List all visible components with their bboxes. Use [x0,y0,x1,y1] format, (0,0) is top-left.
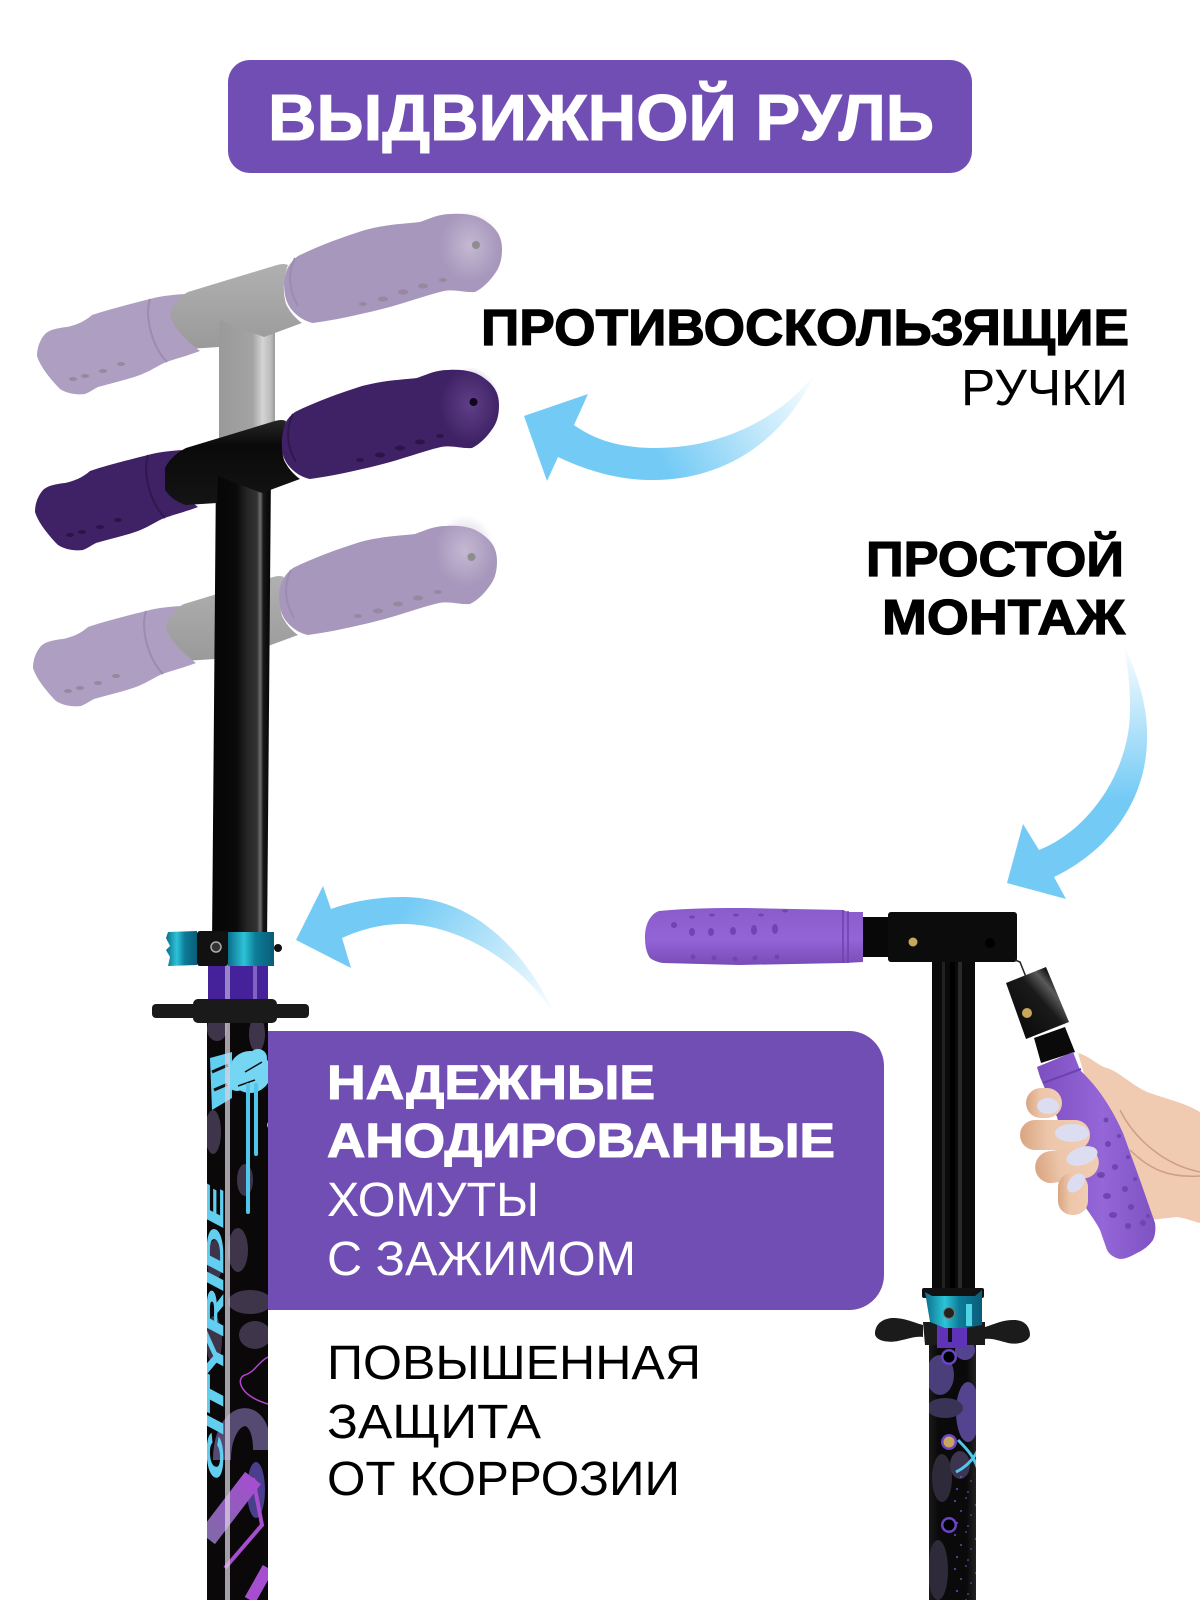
side stem [932,955,975,1300]
text: corrosion protection: ЗАЩИТА [327,1396,541,1449]
wire [1015,960,1026,977]
title banner [228,60,972,173]
text: simple assembly [866,532,1126,645]
side scooter assembly [645,908,1200,1600]
telescopic stem [212,470,271,945]
panel regular text: С ЗАЖИМОМ [327,1233,636,1286]
arrow: to clamp [296,886,556,1017]
logo sticker and paint drips [210,1049,271,1212]
text: corrosion protection: ПОВЫШЕННАЯ [327,1337,701,1390]
teal X marking [956,1440,978,1472]
panel regular text: ХОМУТЫ [327,1174,539,1227]
main scooter column [35,367,500,1600]
panel regular text [327,1174,636,1286]
lower tube with graphics [207,1023,268,1600]
text: anti-slip grips: ПРОТИВОСКОЛЬЗЯЩИЕ [481,299,1129,356]
purple collar [208,962,268,1002]
text: corrosion protection: ОТ КОРРОЗИИ [327,1453,680,1506]
text: corrosion protection [327,1337,701,1506]
anodized clamp [166,931,282,966]
side anodized clamp [922,1288,984,1328]
tube holes [941,1349,957,1533]
arrow: to grips [524,370,817,481]
hand fingers [1020,1088,1101,1215]
hand palm [1078,1053,1200,1223]
panel: clamps callout [268,1031,884,1310]
text: simple assembly: МОНТАЖ [882,591,1126,645]
panel bold heading: НАДЕЖНЫЕ [327,1057,655,1110]
side purple collar [937,1325,967,1348]
arrow: to side handlebar [1007,642,1147,899]
text: anti-slip grips: РУЧКИ [961,359,1128,416]
text: anti-slip grips [481,299,1129,416]
handlebar grips and T-bar [35,367,500,550]
side purple grip held in hand [1037,1052,1155,1259]
panel bold heading: АНОДИРОВАННЫЕ [327,1115,835,1168]
screw on main tube [267,1120,279,1130]
side plastic clip [875,1318,1030,1345]
side lower tube with graphics [929,1345,976,1600]
ghost handlebar: upper position [37,210,502,445]
side T connector [863,912,1017,962]
heart line art [240,1357,268,1404]
panel bold heading [327,1057,835,1168]
side handle left grip [645,908,863,965]
title text: ВЫДВИЖНОЙ РУЛЬ [268,81,934,154]
brand wordmark: CITYRIDE [202,1184,228,1480]
plastic clip plate [152,999,309,1023]
detached handle section [1006,967,1075,1063]
text: simple assembly: ПРОСТОЙ [866,532,1124,587]
ghost handlebar: lower position [33,515,497,706]
